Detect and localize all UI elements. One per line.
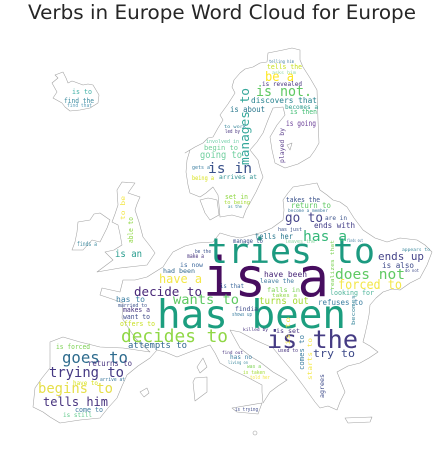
word: are in: are in [325,215,347,222]
word: gets a: gets a [192,165,210,171]
word: is to: is to [72,88,92,96]
word: turns out: turns out [259,296,309,307]
map: continental Europe [33,183,432,423]
word: played by: played by [278,128,286,163]
word: as the: as the [228,204,242,210]
word: have to: have to [73,380,98,387]
word: has been: has been [157,292,346,338]
word cloud [38,59,430,419]
word: want to: want to [123,313,150,321]
word: offers to: offers to [120,320,155,328]
word: is then: is then [290,108,317,116]
word: find out: find out [222,350,243,356]
map: Ireland [72,213,110,250]
word: asks him: asks him [272,70,296,76]
word: is taken: is taken [243,370,265,376]
word: return to: return to [291,201,331,210]
word: is a: is a [203,246,329,309]
word: returns to: returns to [88,359,132,368]
word: refuses to: refuses to [318,298,363,307]
word: was a: was a [247,364,261,370]
word: be a: be a [265,70,294,85]
word: wants to: wants to [173,293,239,308]
word: is to: is to [285,316,292,345]
word: being a: being a [192,175,214,182]
word: killed by: killed by [243,327,268,333]
word: is now: is now [180,261,203,269]
word: used to: used to [278,348,298,354]
word: starts to: starts to [307,338,314,380]
word: goes to: goes to [62,348,128,367]
word: takes the: takes the [286,196,320,204]
word: is forced: is forced [56,343,90,351]
word: come to: come to [75,406,103,414]
word: have been: have been [264,270,307,279]
word: is that: is that [220,283,244,290]
word: does not: does not [335,267,405,283]
word: is also: is also [382,261,414,270]
word: makes a: makes a [123,306,150,314]
word: forced to: forced to [338,278,402,293]
word: decide to: decide to [134,284,202,299]
word: able to: able to [127,217,135,243]
word: tells him: tells him [43,395,108,409]
word: set in: set in [225,193,248,201]
word: appears to: appears to [402,247,430,253]
map: Denmark [200,198,219,220]
word: manages to: manages to [238,88,253,165]
word: tells her: tells her [255,232,293,241]
word: ends up: ends up [378,251,424,263]
map: Crete [345,417,372,423]
map: Sicily [232,403,262,414]
map: Baltic islands [287,143,292,150]
word: is the: is the [267,325,358,354]
word: is revealed: is revealed [262,81,302,88]
word: has to: has to [116,295,145,304]
word: is going: is going [286,119,316,128]
word: do not: do not [405,268,419,274]
word: make a: make a [187,253,204,260]
map: Sardinia [193,377,207,401]
word: try to: try to [313,347,355,360]
word: is set: is set [276,327,300,335]
word: finds a: finds a [77,241,97,248]
word: is not: is not. [256,84,312,100]
word: falls in: falls in [267,286,300,294]
word: comes to: comes to [298,335,306,370]
word: tells the: tells the [267,63,302,71]
word: tries to: tries to [207,232,375,272]
word: is trying: is trying [235,407,258,413]
word: realizes that: realizes that [330,240,336,290]
word: is in: is in [208,161,252,177]
map: Corsica [197,358,207,373]
word: involved in: involved in [206,139,239,145]
word: arrive at: arrive at [100,377,125,383]
word: has been small: to work [224,124,246,130]
word: ends with: ends with [314,221,355,230]
word: to be: to be [119,196,127,220]
word: discovers that: discovers that [251,96,317,105]
word: begin to: begin to [204,144,238,152]
word: told her: told her [250,375,270,381]
map: Great Britain [97,182,155,272]
word: is an: is an [115,249,142,260]
word: become: become a member [288,208,328,214]
word: be the: be the [195,249,211,255]
map: Cyprus [253,431,257,435]
map of Europe outline [33,48,432,435]
word: to being: to being [224,200,250,206]
word: is about: is about [230,105,265,114]
word: finds: findia [235,305,258,313]
word: begins to: begins to [38,381,113,397]
word: leaves the: leaves the [285,239,315,245]
word: married to: married to [118,303,147,309]
map: Scandinavia [185,48,319,218]
word: had been: had been [163,267,195,275]
word: attempts to: attempts to [128,341,187,351]
title: Verbs in Europe Word Cloud for Europe [28,1,416,24]
word: leave the: leave the [260,278,294,285]
word: manage to: manage to [233,238,263,245]
word: find that: find that [67,103,92,109]
word: find the: find the [64,97,94,105]
word: agrees: agrees [318,374,326,398]
word: takes a: takes a [272,293,297,299]
word: trying to: trying to [49,365,124,381]
map: Iceland [52,72,99,111]
word: has no: has no [230,353,252,361]
map: Balearic island [140,388,149,397]
word: has a: has a [303,229,347,245]
word: is still: is still [63,411,92,419]
word: looking for: looking for [330,289,374,297]
word: living on: living on [228,360,248,366]
word: becomes: becomes [351,295,357,325]
word: finds out: finds out [347,238,363,244]
word: has just: has just [278,227,302,233]
word: shows up: shows up [232,312,252,318]
word: decides to: decides to [121,326,228,347]
word: led by: led by [225,129,241,135]
word: arrives at: arrives at [219,173,257,181]
word: have a: have a [159,272,202,286]
word: telling him: telling him [269,59,294,65]
word: becomes a: becomes a [285,104,318,111]
word: go to: go to [285,211,323,226]
word: going to: going to [200,150,242,161]
